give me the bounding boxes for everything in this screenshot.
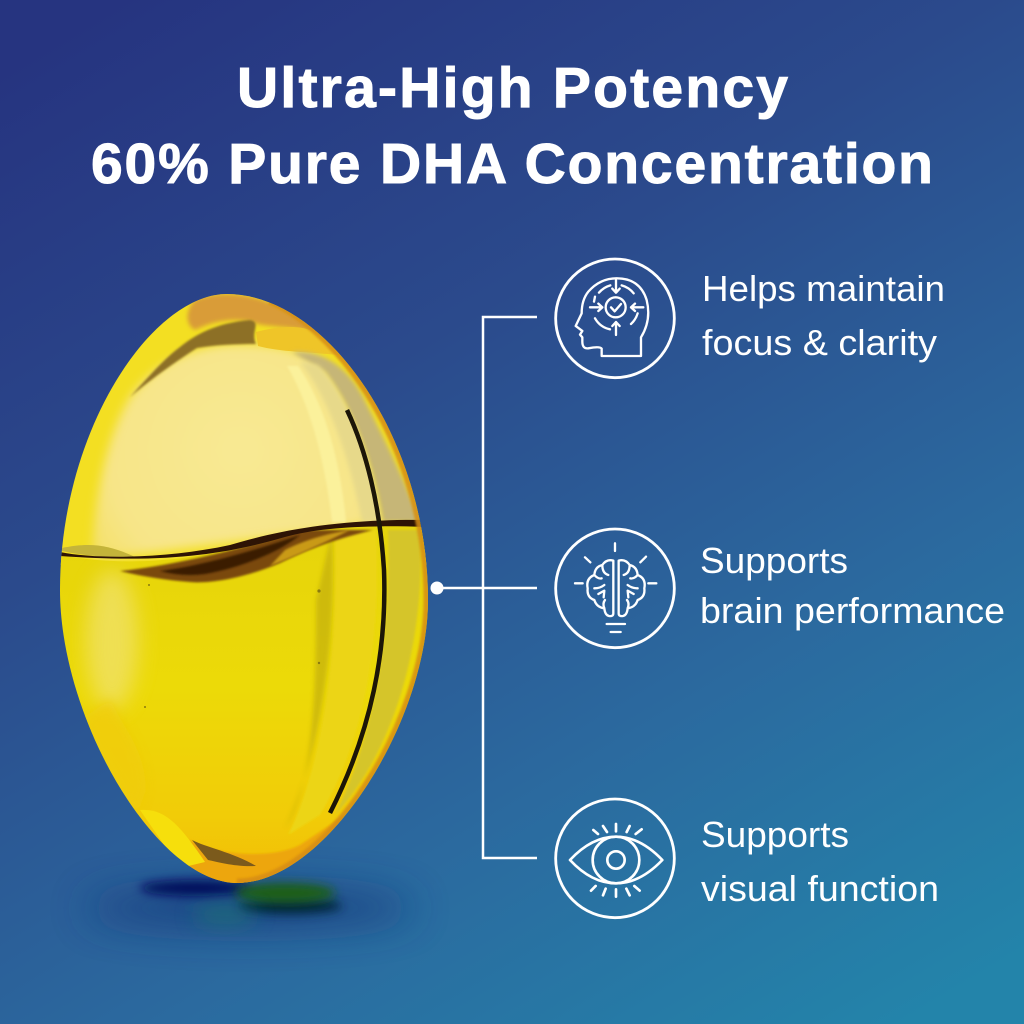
vertical light band upper: [287, 366, 346, 522]
icon: eye: [556, 799, 674, 918]
connector lines: [430, 317, 537, 858]
lower left gold shade: [84, 698, 137, 813]
meniscus left: [62, 545, 135, 557]
left rim yellow: [50, 285, 440, 565]
title: Ultra-High Potency: [237, 56, 788, 120]
bottom brown fold: [192, 840, 256, 866]
liquid dark streak: [160, 535, 300, 575]
base lower oil: [50, 521, 440, 890]
icon: head with focus target: [556, 259, 674, 378]
benefit text: visual function: Supports: [701, 814, 849, 855]
top highlight patch: [256, 327, 338, 355]
top amber cap: [185, 294, 317, 332]
capsule shadow: [85, 880, 415, 928]
lower vertical shade: [290, 542, 334, 818]
softgel capsule: [50, 285, 440, 900]
liquid surface line: [60, 520, 425, 559]
bottom amber base: [188, 817, 344, 883]
benefit text: focus and clarity: focus & clarity: [702, 322, 937, 363]
pale strip next to seam: [300, 362, 381, 522]
benefit text: focus and clarity: Helps maintain: [702, 268, 945, 309]
lower right band: [335, 530, 421, 815]
bottom bright patch: [140, 810, 205, 868]
lower left highlight: [86, 570, 138, 710]
title: [91, 56, 933, 196]
benefit text: brain performance: brain performance: [700, 590, 1005, 631]
bubbles: [144, 584, 321, 708]
seam: [330, 410, 384, 813]
amber right edge: [237, 300, 428, 883]
right grey band upper: [292, 352, 420, 522]
title: 60% Pure DHA Concentration: [91, 132, 933, 196]
liquid amber streaks: [270, 530, 350, 566]
lower strip right of shade: [288, 530, 377, 835]
benefit text: brain performance: [700, 540, 1005, 631]
benefit text: focus and clarity: [702, 268, 945, 363]
liquid wave amber body: [120, 530, 373, 582]
benefit text: brain performance: Supports: [700, 540, 848, 581]
benefit text: visual function: [701, 814, 939, 909]
top dark fold: [130, 320, 256, 397]
upper pale chamber: [92, 344, 383, 560]
benefit text: visual function: visual function: [701, 868, 939, 909]
icon: brain light bulb: [556, 529, 674, 648]
